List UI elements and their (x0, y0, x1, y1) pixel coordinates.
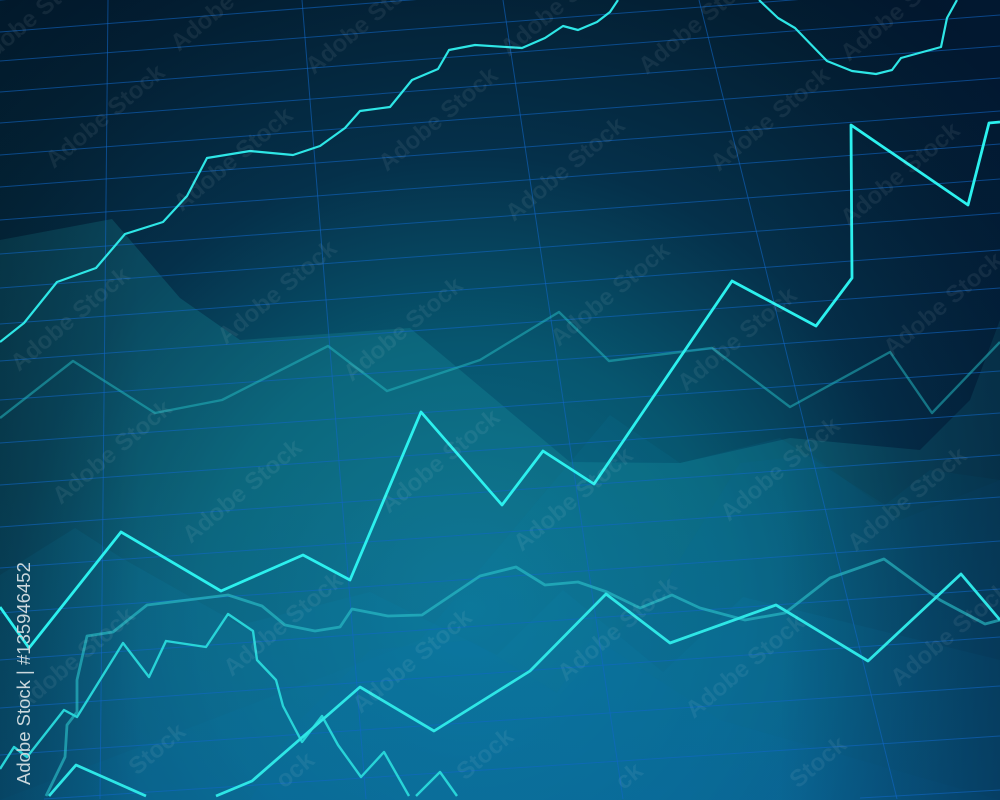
watermark text: Adobe Stock (212, 234, 343, 350)
watermark text: Adobe Stock (168, 101, 299, 217)
watermark text: ock (271, 746, 320, 794)
watermark text: Adobe Stock (508, 441, 639, 557)
watermark text: Adobe Stock (680, 608, 811, 724)
watermark text: Adobe Stock (177, 433, 308, 549)
watermark text: Adobe Stock (500, 111, 631, 227)
watermark text: Adobe Stock (40, 58, 171, 174)
bright line: lower left jagged series (0, 614, 457, 796)
watermark text: Adobe Stock (373, 61, 504, 177)
bright line: bottom series (49, 574, 1000, 796)
watermark text: Adobe Stock (672, 281, 803, 397)
watermark text: Adobe Stock (5, 261, 136, 377)
watermark text: Adobe Stock (715, 411, 846, 527)
faint line: lower wavy series (46, 559, 1000, 796)
area: right plateau layer (560, 455, 1000, 800)
watermark text: Adobe Stock (835, 116, 966, 232)
faint line: mid-left series (0, 312, 1000, 418)
area: upper teal layer (0, 219, 1000, 800)
watermark text: Adobe Stock (552, 571, 683, 687)
watermark text: Adobe Stock (375, 403, 506, 519)
area: middle peak layer (0, 415, 1000, 800)
stock id label: Adobe Stock | #135946452 (13, 562, 34, 785)
watermark text: Adobe Stock (218, 566, 349, 682)
bright line: top series (0, 0, 618, 342)
watermark text: Adobe Stock (842, 441, 973, 557)
bright line: main rising series (0, 122, 1000, 648)
watermark text: Adobe Stock (347, 603, 478, 719)
watermark text: ck (610, 757, 649, 795)
watermark text: Adobe Stock (705, 61, 836, 177)
watermark text: Adobe Stock (47, 394, 178, 510)
watermark text: Adobe Stock (338, 271, 469, 387)
watermark text: Stock (451, 722, 519, 786)
watermark text: Stock (784, 730, 852, 794)
area: bottom blue layer (250, 637, 1000, 800)
watermark text: Adobe Stock (545, 236, 676, 352)
area: left low layer (0, 528, 1000, 800)
watermark text: Adobe Stock (10, 601, 141, 717)
bright line: top right series (759, 0, 957, 74)
watermark text: Stock (123, 717, 191, 781)
